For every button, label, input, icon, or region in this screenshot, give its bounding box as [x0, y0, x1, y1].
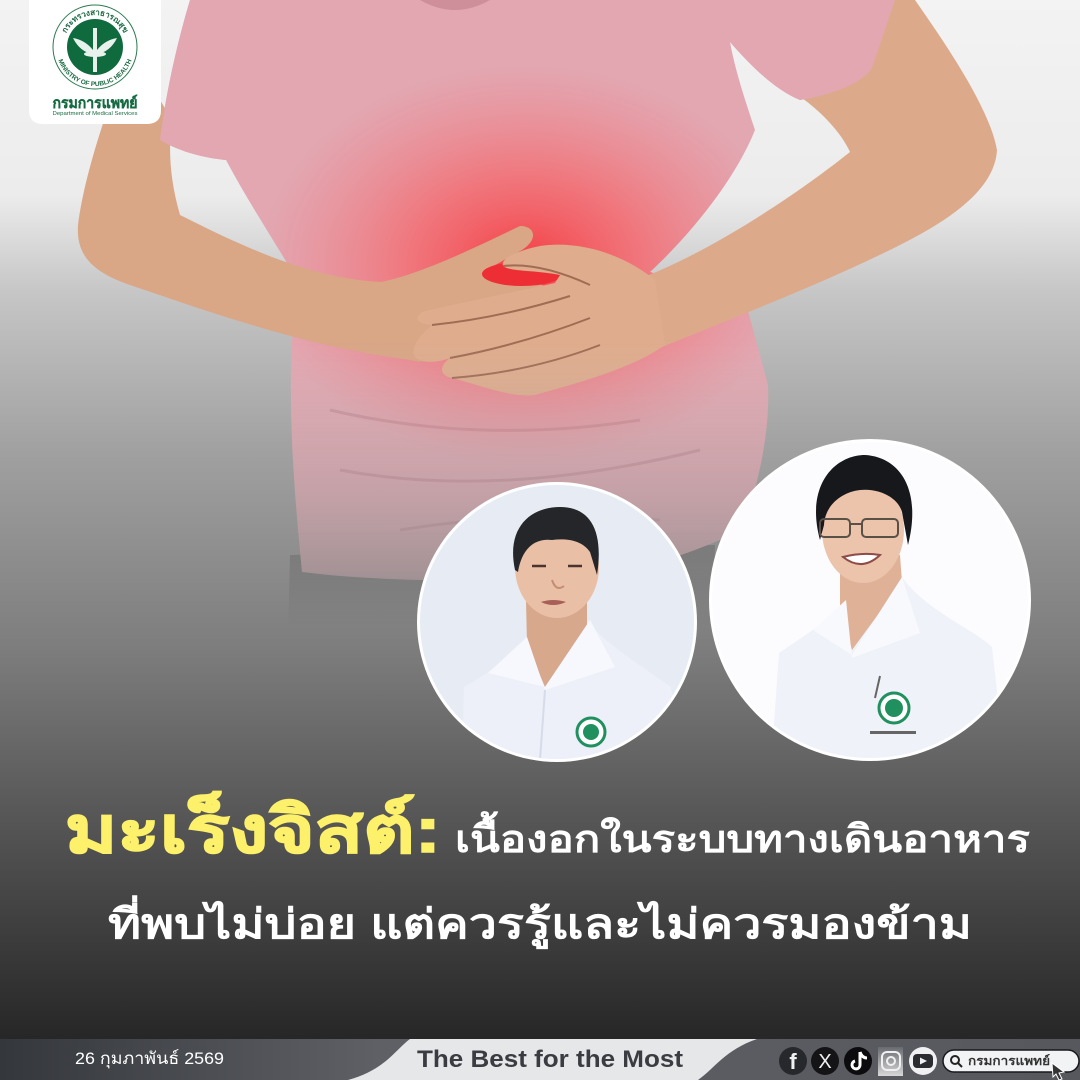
bar — [0, 1039, 1080, 1080]
trousers — [290, 545, 715, 593]
logo wordmark: กรมการแพทย์ — [52, 94, 138, 112]
caduceus — [73, 28, 117, 72]
hair — [513, 507, 599, 575]
red hot spot — [482, 262, 562, 286]
nose — [552, 580, 564, 588]
icon: cursor — [1052, 1063, 1064, 1080]
eyes — [532, 565, 582, 567]
smile — [843, 554, 880, 564]
portrait backdrop — [705, 435, 1035, 765]
photo: person holding stomach — [78, 0, 997, 640]
badge — [577, 718, 605, 746]
slogan panel — [348, 1039, 757, 1080]
headline line 2: ที่พบไม่บ่อย แต่ควรรู้และไม่ควรมองข้าม — [108, 895, 972, 950]
footer bar — [0, 1039, 1080, 1080]
left arm — [78, 102, 430, 362]
icon: X — [811, 1047, 839, 1075]
icon: youtube — [909, 1047, 937, 1075]
portrait: right doctor — [705, 435, 1035, 765]
red pain glow — [290, 88, 749, 436]
badge caption — [870, 731, 916, 734]
slogan: The Best for the Most — [417, 1046, 683, 1073]
seal: MINISTRY OF PUBLIC HEALTH — [58, 58, 132, 86]
icon: magnifier — [951, 1056, 962, 1067]
face — [822, 490, 904, 583]
date: 26 กุมภาพันธ์ 2569 — [75, 1049, 224, 1069]
shirt folds — [330, 410, 700, 530]
portrait border — [709, 439, 1031, 761]
collar — [813, 577, 920, 658]
neckline — [420, 0, 490, 10]
seal text: กระทรวงสาธารณสุข — [62, 10, 128, 33]
icon: instagram — [878, 1047, 903, 1076]
logo card — [29, 0, 161, 124]
card — [29, 0, 161, 124]
logo subtitle: Department of Medical Services — [52, 111, 138, 117]
hair — [816, 455, 912, 545]
finger lines — [432, 265, 600, 378]
right arm — [620, 0, 997, 352]
portrait backdrop — [420, 485, 694, 722]
portrait: left doctor — [410, 480, 710, 770]
placket — [540, 690, 545, 760]
search text: กรมการแพทย์ — [968, 1054, 1050, 1068]
search box — [943, 1050, 1079, 1080]
seal — [52, 4, 138, 90]
back hand — [381, 226, 544, 362]
neck — [526, 595, 587, 687]
badge — [879, 693, 909, 723]
neck — [840, 555, 902, 650]
icon: X: X — [818, 1051, 832, 1073]
shirt — [462, 620, 680, 765]
left sleeve — [160, 0, 225, 160]
mouth — [541, 600, 566, 605]
face — [515, 539, 599, 618]
icon: tiktok — [844, 1047, 872, 1075]
icon: facebook — [779, 1047, 807, 1075]
icon: facebook: f — [789, 1049, 797, 1074]
pen — [875, 676, 880, 698]
glasses — [820, 519, 898, 537]
front hand — [413, 245, 665, 395]
portrait border — [417, 482, 697, 762]
collar — [488, 620, 615, 690]
right sleeve — [720, 0, 895, 100]
t-shirt — [164, 0, 804, 580]
shirt — [771, 577, 998, 765]
headline line 1 white: เนื้องอกในระบบทางเดินอาหาร — [455, 811, 1031, 861]
headline line 1 yellow: มะเร็งจิสต์: — [65, 792, 441, 866]
